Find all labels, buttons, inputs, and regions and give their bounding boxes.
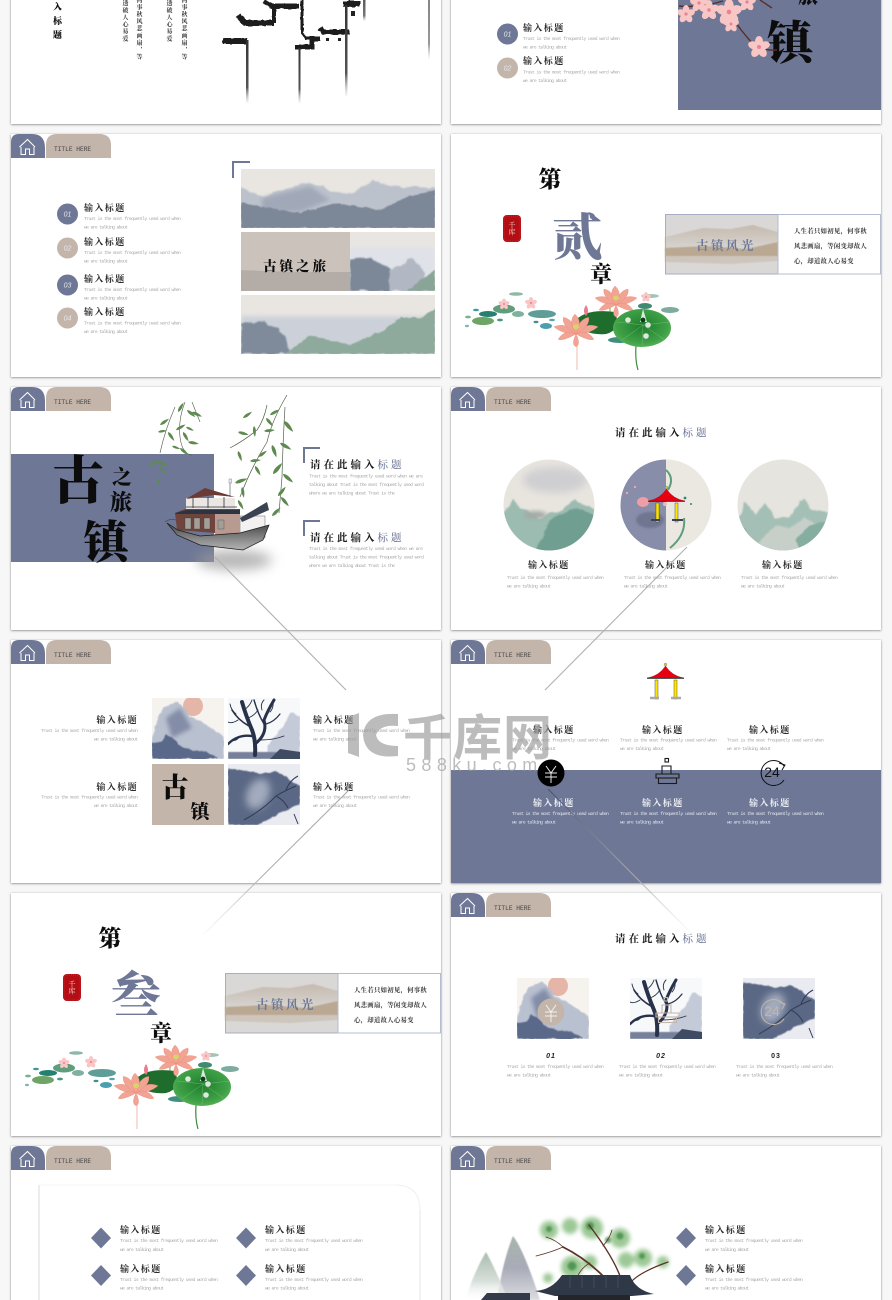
chapter heading: [98, 926, 172, 1046]
list item 04: [57, 306, 181, 335]
willow right: [230, 395, 295, 517]
header tab: [451, 1146, 551, 1170]
item bottom: 输入标题: [705, 1263, 747, 1274]
watermark logo: 千库网: [403, 699, 553, 770]
list item 04: Trust is the most frequently used word when: [84, 320, 181, 326]
column label lower 3: we are talking about: [727, 820, 771, 826]
chapter heading: 第: [538, 167, 562, 192]
list item 01: 01: [64, 212, 71, 218]
vertical heading: 入标题: [52, 2, 62, 44]
watermark logo: [348, 699, 553, 775]
text block 1: [304, 448, 424, 496]
chapter heading: 章: [590, 262, 612, 287]
caption box: 风悲画扇，等闲变却故人: [354, 1000, 427, 1010]
caption box: 风悲画扇，等闲变却故人: [794, 241, 867, 251]
label bottom left: 输入标题: [96, 781, 138, 792]
list item 02: we are talking about: [523, 78, 567, 84]
caption box: 心，却道故人心易变: [794, 256, 854, 266]
image card 2 with stamp icon: [630, 978, 702, 1039]
item top right: we are talking about: [265, 1247, 309, 1253]
column label lower 2: 输入标题: [642, 797, 684, 808]
list item 04: 04: [64, 316, 71, 322]
item top: [676, 1224, 803, 1253]
item top right: Trust is the most frequently used word when: [265, 1238, 363, 1244]
column label lower 3: 输入标题: [749, 797, 791, 808]
item bottom left: we are talking about: [120, 1286, 164, 1292]
item bottom right: Trust is the most frequently used word when: [265, 1277, 363, 1283]
willow left: [149, 402, 203, 487]
label 01: 01: [546, 1053, 556, 1060]
image card 3 with 24 icon: [743, 978, 815, 1039]
chapter heading: 贰: [552, 210, 602, 266]
panel: icon columns slide: [451, 640, 881, 883]
circle label 1: Trust is the most frequently used word when: [507, 575, 604, 581]
circle label 1: 输入标题: [528, 559, 570, 570]
column label upper 3: we are talking about: [727, 746, 771, 752]
column label lower 2: [620, 797, 717, 826]
item bottom left: 输入标题: [120, 1263, 162, 1274]
rounded frame: [39, 1185, 420, 1300]
item top right: [236, 1224, 363, 1253]
circle label 3: we are talking about: [741, 584, 785, 590]
panel: three circles slide: [451, 387, 881, 630]
list item 01: 输入标题: [84, 202, 126, 213]
list item 02: 02: [504, 66, 511, 72]
chapter heading: [538, 167, 612, 287]
header tab: [11, 387, 111, 411]
column label upper 2: we are talking about: [620, 746, 664, 752]
label 02: we are talking about: [619, 1072, 663, 1078]
column label upper 1: [512, 724, 609, 752]
header tab: [451, 640, 551, 664]
icon: pavilion: [647, 663, 684, 699]
label bottom left: [41, 781, 138, 809]
caption box: [665, 214, 880, 274]
column label lower 2: Trust is the most frequently used word when: [620, 811, 717, 817]
header tab: TITLE HERE: [54, 146, 91, 153]
circle label 1: [507, 559, 604, 590]
grid image: ink branch: [228, 764, 300, 825]
boat shadow: [196, 550, 272, 570]
column label upper 2: [620, 724, 717, 752]
list item 01: Trust is the most frequently used word when: [523, 36, 620, 42]
column label upper 3: Trust is the most frequently used word when: [727, 738, 824, 744]
image card 1 with yen icon: [517, 976, 589, 1039]
blue title block: [11, 453, 214, 568]
item top: 输入标题: [705, 1224, 747, 1235]
column label upper 2: 输入标题: [642, 724, 684, 735]
list item 02: 02: [64, 246, 71, 252]
list item 02: [497, 55, 620, 84]
label top right: [313, 714, 410, 742]
column label lower 1: 输入标题: [533, 797, 575, 808]
header tab: TITLE HERE: [494, 1158, 531, 1165]
label top right: 输入标题: [313, 714, 355, 725]
item bottom: we are talking about: [705, 1286, 749, 1292]
item top left: we are talking about: [120, 1247, 164, 1253]
column label lower 3: [727, 797, 824, 826]
item bottom right: [236, 1263, 363, 1292]
label 03: [736, 1053, 833, 1078]
text block 1: talking about Trust is the most frequently used word: [309, 482, 424, 488]
circle label 2: [624, 559, 721, 590]
blue title block: 镇: [767, 18, 820, 69]
circle label 2: 输入标题: [645, 559, 687, 570]
item bottom right: we are talking about: [265, 1286, 309, 1292]
illustration: boat: [165, 479, 269, 550]
panel: three numbered images slide: [451, 893, 881, 1136]
slide title: 请在此输入标题: [615, 426, 710, 439]
panel: mountain list slide: [11, 134, 441, 377]
column label lower 3: Trust is the most frequently used word when: [727, 811, 824, 817]
list item 02: we are talking about: [84, 258, 128, 264]
circle label 3: 输入标题: [762, 559, 804, 570]
list item 04: we are talking about: [84, 329, 128, 335]
vertical poem columns: 透破人心易爱: [165, 0, 173, 43]
red seal: 千库: [67, 980, 77, 996]
blossom branch: [676, 0, 777, 59]
lotus illustration: [465, 286, 679, 370]
header tab: TITLE HERE: [494, 652, 531, 659]
item bottom left: Trust is the most frequently used word when: [120, 1277, 218, 1283]
header tab: [11, 640, 111, 664]
caption box: 人生若只如初见，何事秋: [354, 985, 427, 995]
panel: four image grid slide: [11, 640, 441, 883]
item bottom: Trust is the most frequently used word when: [705, 1277, 803, 1283]
header tab: [451, 893, 551, 917]
text block 2: talking about Trust is the most frequently used word: [309, 554, 424, 560]
ink drawing: eaves and walls: [223, 0, 430, 103]
header tab: TITLE HERE: [54, 399, 91, 406]
column label upper 3: [727, 724, 824, 752]
watermark diagonal lines: [203, 547, 693, 935]
label 02: 02: [656, 1053, 666, 1060]
caption box: 古镇风光: [256, 997, 316, 1012]
item top: we are talking about: [705, 1247, 749, 1253]
label bottom left: we are talking about: [94, 803, 138, 809]
vertical poem columns: [121, 0, 187, 61]
list item 03: [57, 273, 181, 302]
image card 3 with 24 icon: 24: [764, 1003, 780, 1019]
label top left: we are talking about: [94, 736, 138, 742]
list item 02: [57, 236, 181, 264]
label bottom right: [313, 781, 410, 809]
circle image 1: [503, 459, 595, 552]
label top left: [41, 714, 138, 742]
header tab: TITLE HERE: [494, 399, 531, 406]
header tab: TITLE HERE: [494, 905, 531, 912]
landscape strip 1: [241, 169, 435, 228]
list item 03: 03: [64, 282, 71, 290]
list item 04: 输入标题: [84, 306, 126, 317]
label 01: we are talking about: [507, 1072, 551, 1078]
column label upper 1: we are talking about: [512, 746, 556, 752]
red seal: [63, 974, 81, 1001]
label bottom right: Trust is the most frequently used word when: [313, 794, 410, 800]
column label lower 1: Trust is the most frequently used word when: [512, 811, 609, 817]
list item 01: we are talking about: [523, 44, 567, 50]
list item 02: 输入标题: [523, 55, 565, 66]
grid tile: title: 镇: [190, 801, 212, 823]
icon: 24 hours: 24: [764, 764, 780, 780]
list item 01: 输入标题: [523, 22, 565, 33]
landscape strip 3: [241, 295, 435, 354]
column label lower 1: we are talking about: [512, 820, 556, 826]
list item 01: [57, 202, 181, 230]
column label upper 3: 输入标题: [749, 724, 791, 735]
chapter heading: 叁: [111, 968, 161, 1024]
item bottom left: [91, 1263, 218, 1292]
blue title block: 镇: [83, 518, 135, 568]
blue lower band: [451, 770, 881, 883]
caption box: [225, 973, 440, 1033]
chapter heading: 章: [150, 1021, 172, 1046]
column label upper 1: 输入标题: [533, 724, 575, 735]
label 02: [619, 1053, 716, 1078]
list item 02: Trust is the most frequently used word when: [84, 250, 181, 256]
text block 2: where we are talking about Trust is the: [309, 563, 395, 569]
list item 01: 01: [504, 32, 511, 38]
list item 03: we are talking about: [84, 296, 128, 302]
lotus illustration: [25, 1045, 239, 1129]
caption box: 心，却道故人心易变: [354, 1015, 414, 1025]
label 01: Trust is the most frequently used word when: [507, 1064, 604, 1070]
circle label 2: we are talking about: [624, 584, 668, 590]
label 03: we are talking about: [736, 1072, 780, 1078]
label 03: 03: [771, 1053, 781, 1060]
caption box: 古镇风光: [696, 238, 756, 253]
header tab: TITLE HERE: [54, 652, 91, 659]
list item 02: Trust is the most frequently used word when: [523, 70, 620, 76]
panel: chapter two slide: [451, 134, 881, 377]
text block 2: [304, 521, 424, 569]
grid tile: title: [152, 764, 224, 825]
grid tile: title: 古: [162, 772, 188, 803]
label top left: 输入标题: [96, 714, 138, 725]
panel: four diamonds slide: [11, 1146, 441, 1300]
label 01: [507, 1053, 604, 1078]
caption box: 人生若只如初见，何事秋: [794, 226, 867, 236]
item top left: [91, 1224, 218, 1253]
text block 1: where we are talking about Trust is the: [309, 490, 395, 496]
panel: boat and willow slide: [11, 387, 441, 630]
blue title block: 旅: [110, 490, 132, 515]
panel: blossom title slide: [451, 0, 881, 124]
label bottom right: we are talking about: [313, 803, 357, 809]
item top left: 输入标题: [120, 1224, 162, 1235]
panel: chapter three slide: [11, 893, 441, 1136]
circle image 2 with pavilion: [620, 459, 712, 551]
item bottom: [676, 1263, 803, 1292]
header tab: [451, 387, 551, 411]
circle label 2: Trust is the most frequently used word when: [624, 575, 721, 581]
watermark logo: 588ku.com: [406, 755, 543, 775]
label 02: Trust is the most frequently used word when: [619, 1064, 716, 1070]
icon: yen: [538, 760, 564, 786]
list item 01: Trust is the most frequently used word when: [84, 216, 181, 222]
blue title block: 古: [52, 453, 104, 511]
column label lower 1: [512, 797, 609, 826]
panel: cropped ink architecture slide: [11, 0, 441, 124]
red seal: 千库: [507, 221, 517, 237]
header tab: TITLE HERE: [54, 1158, 91, 1165]
list item 01: [497, 22, 620, 50]
list item 01: we are talking about: [84, 224, 128, 230]
circle image 3: [737, 459, 829, 552]
vertical poem columns: 透破人心易爱: [121, 0, 129, 43]
label top right: Trust is the most frequently used word when: [313, 728, 410, 734]
item top right: 输入标题: [265, 1224, 307, 1235]
text block 2: 请在此输入标题: [310, 531, 404, 544]
item bottom right: 输入标题: [265, 1263, 307, 1274]
panel: mountain and pine slide: [451, 1146, 881, 1300]
chapter heading: 第: [98, 926, 122, 951]
landscape strip 2 with title: [241, 232, 435, 291]
label 03: Trust is the most frequently used word when: [736, 1064, 833, 1070]
red seal: [503, 215, 521, 242]
header tab: [11, 134, 111, 158]
corner bracket: [233, 162, 250, 178]
blue title block: [678, 0, 881, 110]
text block 1: Trust is the most frequently used word when we are: [309, 474, 423, 480]
blue title block: 之: [112, 466, 132, 489]
circle label 3: [741, 559, 838, 590]
landscape strip 2 with title: 古镇之旅: [263, 258, 329, 275]
label top left: Trust is the most frequently used word when: [41, 728, 138, 734]
list item 03: Trust is the most frequently used word when: [84, 287, 181, 293]
label bottom left: Trust is the most frequently used word when: [41, 794, 138, 800]
circle label 1: we are talking about: [507, 584, 551, 590]
column label lower 2: we are talking about: [620, 820, 664, 826]
slide title: 请在此输入标题: [615, 932, 710, 945]
grid image: plum tree: [228, 698, 300, 759]
list item 02: 输入标题: [84, 236, 126, 247]
circle label 3: Trust is the most frequently used word when: [741, 575, 838, 581]
item top: Trust is the most frequently used word when: [705, 1238, 803, 1244]
column label upper 2: Trust is the most frequently used word when: [620, 738, 717, 744]
text block 2: Trust is the most frequently used word when we are: [309, 546, 423, 552]
header tab: [11, 1146, 111, 1170]
grid image: mountain and sun: [152, 696, 224, 759]
column label upper 1: Trust is the most frequently used word when: [512, 738, 609, 744]
label bottom right: 输入标题: [313, 781, 355, 792]
illustration: mountains, pine and roof: [465, 1217, 669, 1300]
item top left: Trust is the most frequently used word when: [120, 1238, 218, 1244]
list item 03: 输入标题: [84, 273, 126, 284]
label top right: we are talking about: [313, 736, 357, 742]
icon: printer stamp: [656, 758, 679, 784]
icon: 24 hours: [761, 760, 785, 785]
text block 1: 请在此输入标题: [310, 458, 404, 471]
